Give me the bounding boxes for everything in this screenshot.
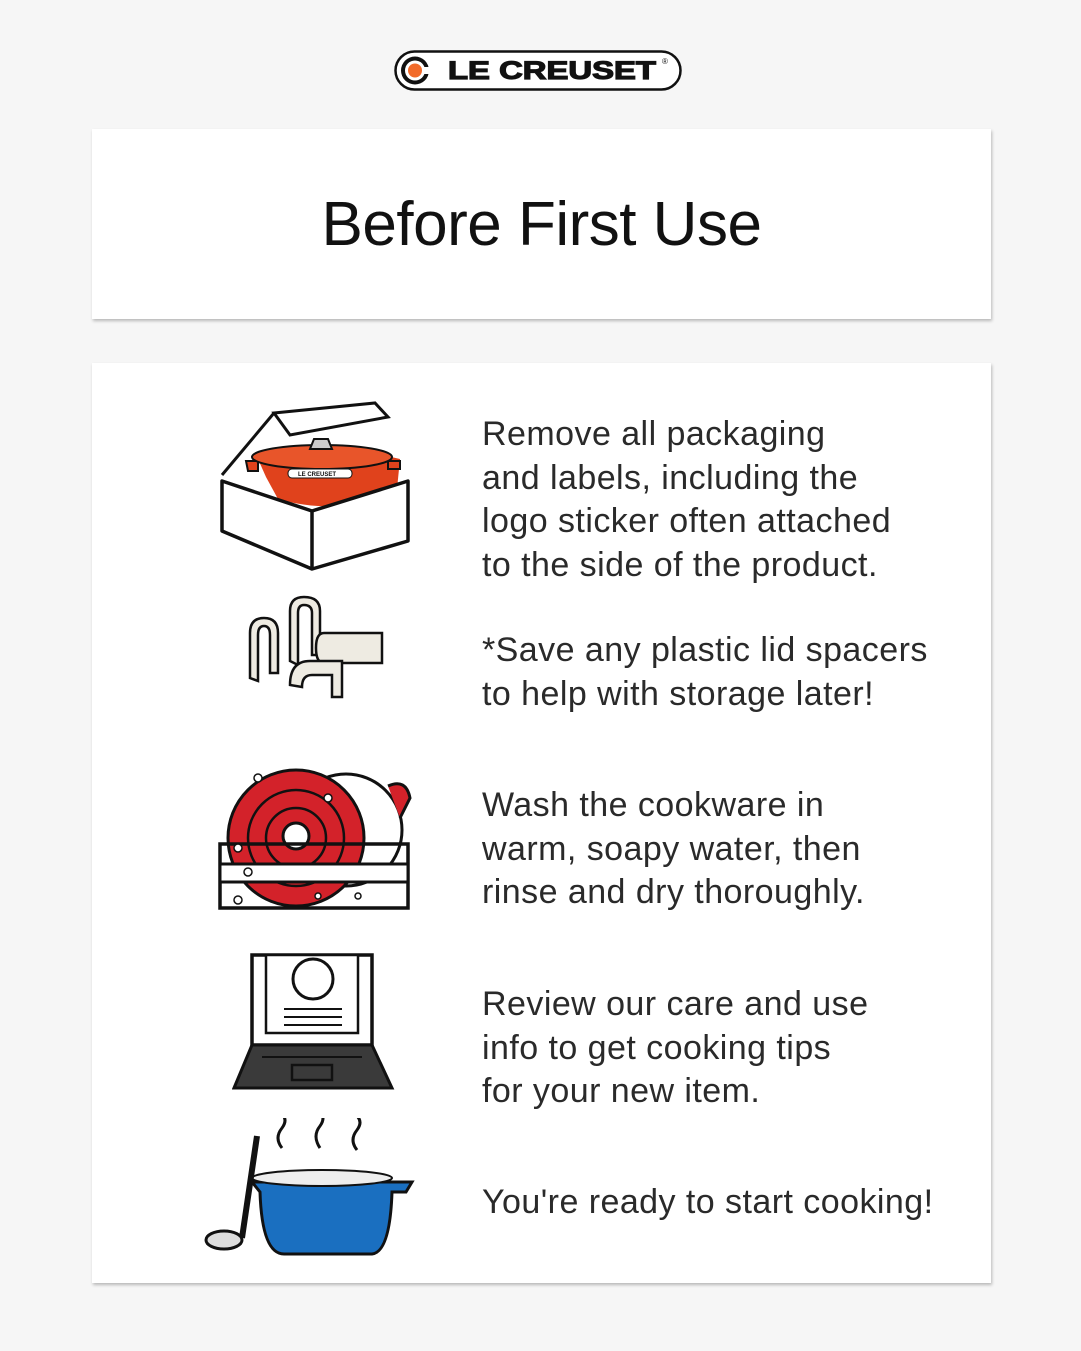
text: step 2: Wash the cookware in xyxy=(482,786,824,824)
text: step 1 xyxy=(482,415,891,584)
text: step 2 xyxy=(482,786,865,911)
header panel xyxy=(92,129,991,319)
text: step 4: You're ready to start cooking! xyxy=(482,1183,934,1221)
icon: lid spacers xyxy=(248,596,384,698)
text: step 2: rinse and dry thoroughly. xyxy=(482,873,865,911)
text: spacer note xyxy=(482,631,928,712)
logo: ® xyxy=(662,57,668,66)
text: step 3: info to get cooking tips xyxy=(482,1028,831,1066)
icon: blue pot with ladle xyxy=(204,1118,415,1256)
text: step 3 xyxy=(482,985,868,1110)
text: step 2: warm, soapy water, then xyxy=(482,830,861,868)
logo xyxy=(394,50,682,91)
title: Before First Use xyxy=(322,190,761,259)
text: step 3: for your new item. xyxy=(482,1072,760,1110)
logo: LE CREUSET xyxy=(448,57,656,85)
text: step 1: to the side of the product. xyxy=(482,546,878,584)
text: spacer note: to help with storage later! xyxy=(482,674,874,712)
text: spacer note: *Save any plastic lid spacers xyxy=(482,631,928,669)
icon: washing pot xyxy=(218,768,412,910)
text: step 3: Review our care and use xyxy=(482,985,868,1023)
text: step 1: logo sticker often attached xyxy=(482,502,891,540)
main panel xyxy=(92,363,991,1283)
icon: pot in box xyxy=(220,401,410,571)
text: step 1: Remove all packaging xyxy=(482,415,826,453)
text: step 1: and labels, including the xyxy=(482,458,858,496)
icon: laptop xyxy=(232,953,394,1090)
icon: pot in box: LE CREUSET xyxy=(298,472,336,478)
